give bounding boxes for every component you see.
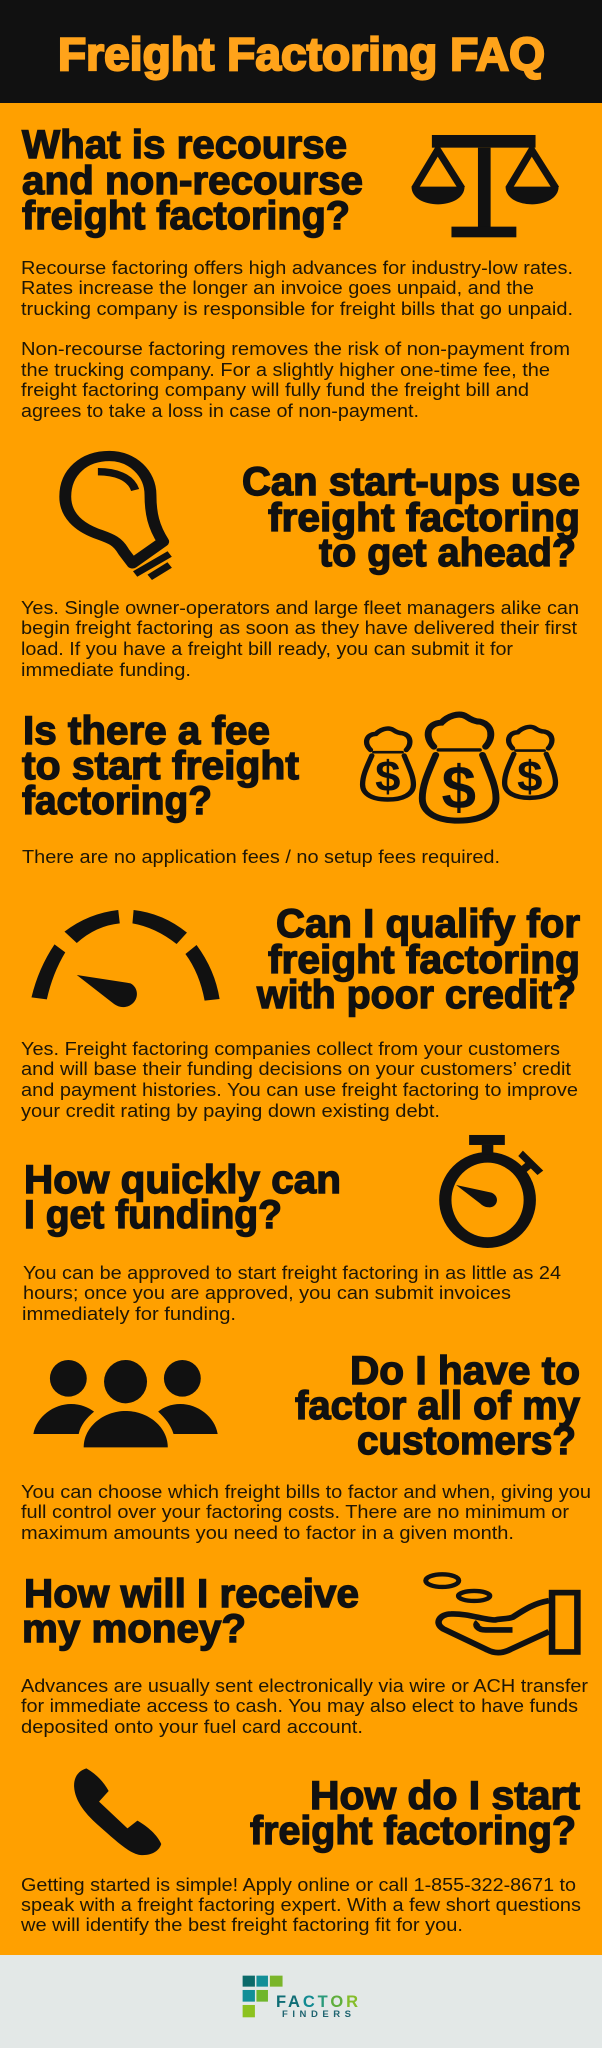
icon: right bag [505, 727, 555, 798]
body text: load. If you have a freight bill ready, you can submit it for [21, 638, 513, 659]
icon: left bag [363, 728, 413, 800]
body text: Yes. Freight factoring companies collect from your customers [21, 1038, 560, 1059]
body text: and payment histories. You can use freight factoring to improve [21, 1079, 578, 1100]
icon: telephone handset [74, 1768, 161, 1855]
heading [256, 902, 580, 1017]
heading [295, 1349, 581, 1463]
body text: You can be approved to start freight factoring in as little as 24 [23, 1262, 561, 1283]
body text: maximum amounts you need to factor in a given month. [21, 1522, 514, 1543]
dollar signs: $ [441, 754, 476, 822]
body text [21, 1038, 578, 1121]
body text: and will base their funding decisions on your customers’ credit [21, 1058, 572, 1079]
heading: with poor credit? [256, 973, 576, 1017]
heading [24, 1158, 341, 1237]
body text [20, 1874, 581, 1935]
heading: freight factoring? [250, 1809, 576, 1853]
heading: freight factoring? [22, 194, 350, 238]
body text: for immediate access to cash. You may also elect to have funds [21, 1695, 578, 1716]
heading: factoring? [22, 779, 212, 823]
panel: fees [22, 709, 555, 867]
body text: Advances are usually sent electronically via wire or ACH transfer [21, 1675, 588, 1696]
heading: I get funding? [24, 1193, 282, 1237]
icon: balance scales [412, 135, 559, 237]
panel: start-ups [21, 456, 580, 680]
heading: Can start-ups use [242, 460, 580, 504]
heading: Can I qualify for [276, 902, 580, 946]
dollar signs: $ [375, 753, 400, 801]
heading: to start freight [22, 744, 299, 788]
icon: hand with coins [426, 1574, 577, 1653]
body text [21, 257, 573, 421]
body text: we will identify the best freight factoring fit for you. [20, 1914, 463, 1935]
icon: stopwatch [445, 1135, 543, 1243]
body text: Non-recourse factoring removes the risk of non-payment from [21, 338, 570, 359]
header band [0, 0, 602, 103]
icon: money bags [363, 715, 555, 822]
body text: agrees to take a loss in case of non-payment. [21, 400, 419, 421]
heading: How quickly can [24, 1158, 341, 1202]
body text: deposited onto your fuel card account. [21, 1716, 363, 1737]
logo wordmark: FACTOR [276, 1993, 358, 2011]
body text: freight factoring company will fully fund the freight bill and [21, 379, 529, 400]
icon: centre bag [422, 715, 496, 821]
dollar signs [375, 753, 542, 822]
body text [21, 597, 579, 680]
heading [242, 460, 580, 575]
panel: factor all customers [21, 1349, 591, 1543]
icon: light bulb [65, 456, 170, 577]
dollar signs: $ [517, 753, 542, 801]
heading: and non-recourse [22, 159, 363, 203]
icon: group of people [33, 1360, 218, 1447]
logo subtitle: FINDERS [282, 2009, 351, 2020]
heading [22, 123, 363, 238]
body text: Getting started is simple! Apply online or call 1-855-322-8671 to [21, 1874, 576, 1895]
heading: How will I receive [24, 1572, 359, 1616]
heading [22, 709, 299, 823]
body text: the trucking company. For a slightly higher one-time fee, the [21, 359, 550, 380]
body text: begin freight factoring as soon as they have delivered their first [21, 617, 578, 638]
panel: how to start [20, 1768, 581, 1935]
panel: poor credit [21, 902, 580, 1121]
heading: What is recourse [22, 123, 347, 167]
body text: There are no application fees / no setup fees required. [22, 846, 500, 867]
body text: Recourse factoring offers high advances for industry-low rates. [21, 257, 573, 278]
body text: immediate funding. [21, 659, 191, 680]
heading: How do I start [310, 1774, 580, 1818]
body text [21, 1481, 591, 1543]
body text: your credit rating by paying down existing debt. [21, 1100, 440, 1121]
body text: Yes. Single owner-operators and large fleet managers alike can [21, 597, 579, 618]
body text: trucking company is responsible for freight bills that go unpaid. [21, 298, 573, 319]
heading: to get ahead? [319, 531, 576, 575]
logo mark [243, 1976, 283, 2017]
icon: gauge [31, 910, 220, 1007]
panel: receiving money [21, 1572, 588, 1737]
body text: full control over your factoring costs. There are no minimum or [21, 1501, 569, 1522]
panel: recourse and non-recourse [21, 123, 573, 421]
body text [22, 1262, 561, 1324]
body text: immediately for funding. [22, 1303, 236, 1324]
heading: Do I have to [350, 1349, 580, 1393]
heading: factor all of my [295, 1384, 581, 1428]
panel: funding speed [22, 1135, 561, 1324]
heading: freight factoring [268, 496, 580, 540]
footer band [0, 1955, 602, 2048]
heading: customers? [357, 1419, 576, 1463]
title: Freight Factoring FAQ [58, 28, 545, 80]
body text: You can choose which freight bills to factor and when, giving you [21, 1481, 591, 1502]
heading [250, 1774, 580, 1853]
body text [21, 1675, 588, 1737]
heading: freight factoring [268, 938, 580, 982]
heading [22, 1572, 359, 1651]
heading: Is there a fee [23, 709, 270, 753]
body text: Rates increase the longer an invoice goes unpaid, and the [21, 277, 534, 298]
heading: my money? [22, 1607, 246, 1651]
body text: speak with a freight factoring expert. With a few short questions [21, 1894, 581, 1915]
logo: Factor Finders [243, 1976, 358, 2020]
body text: hours; once you are approved, you can submit invoices [23, 1282, 511, 1303]
